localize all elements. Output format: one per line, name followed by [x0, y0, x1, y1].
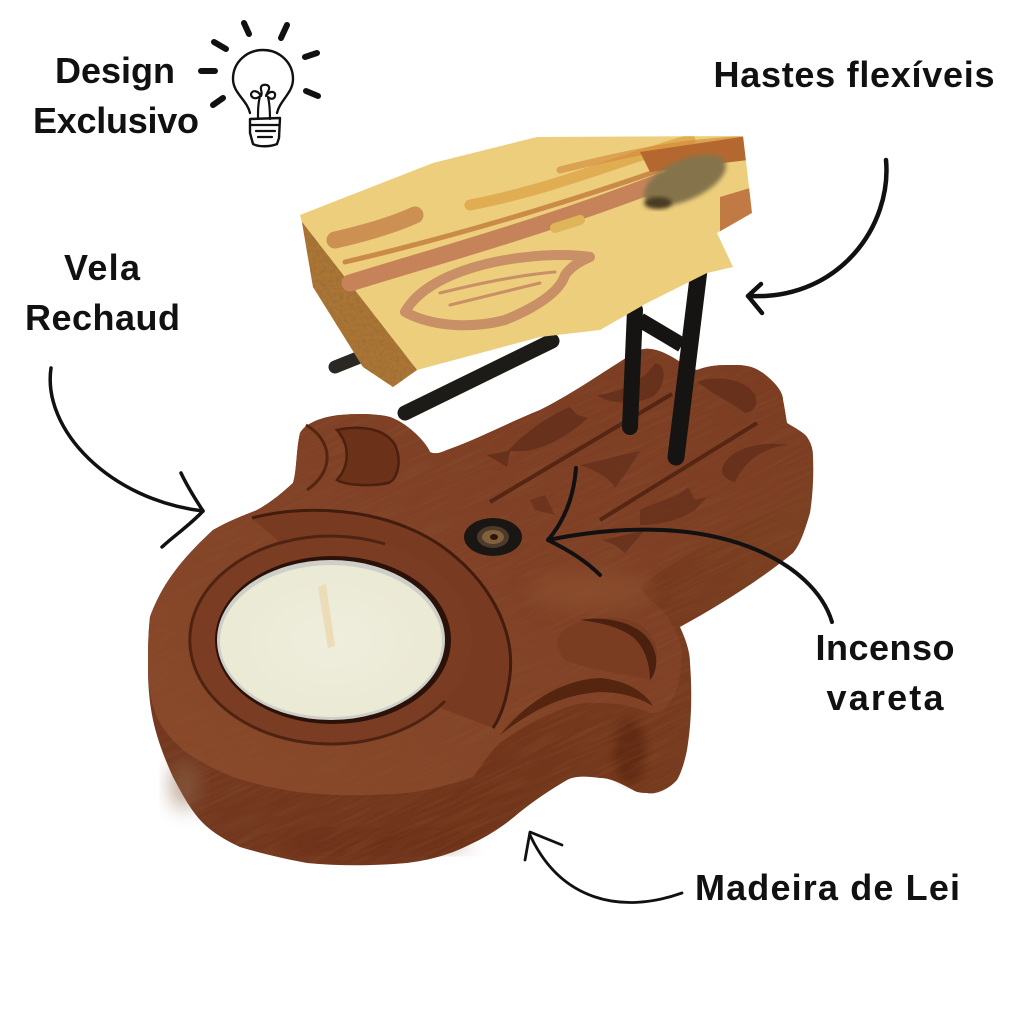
- outer crescent recess: [252, 510, 511, 728]
- tealight candle: [215, 556, 451, 724]
- carved finger grooves: [490, 394, 757, 520]
- label: incenso vareta: vareta: [826, 677, 944, 718]
- dusty patch: [637, 144, 733, 216]
- incense eyelet: [464, 518, 522, 556]
- arrow: incenso vareta: [548, 468, 832, 622]
- label: hastes flexiveis: Hastes flexíveis: [714, 54, 994, 95]
- lower thumb moon carving: [500, 618, 657, 735]
- title: design exclusivo: Design: [55, 50, 175, 91]
- wood grain: [148, 349, 813, 865]
- wooden hamsa holder: [148, 349, 813, 865]
- upper thumb moon carving: [306, 425, 399, 490]
- label: incenso vareta: Incenso: [816, 627, 954, 668]
- label: madeira de lei: Madeira de Lei: [695, 867, 960, 908]
- wood streaks: [335, 136, 752, 325]
- label: vela rechaud: Vela: [64, 247, 141, 288]
- carved fish and moons: [487, 363, 788, 553]
- icon: lightbulb: [201, 23, 318, 146]
- candle ring recess: [190, 536, 472, 744]
- wick: [318, 584, 335, 648]
- oval ring: [405, 255, 590, 325]
- title: design exclusivo: [33, 50, 199, 141]
- metal rods: [335, 270, 699, 457]
- holder top surface: [148, 349, 812, 795]
- wood tone variation: [171, 570, 650, 850]
- label: incenso vareta: [816, 627, 954, 718]
- block end grain face: [302, 222, 417, 387]
- label: vela rechaud: Rechaud: [25, 297, 180, 338]
- palo santo wood block: [300, 136, 752, 387]
- label: vela rechaud: [25, 247, 180, 338]
- arrow: madeira de lei: [525, 832, 682, 902]
- title: design exclusivo: Exclusivo: [33, 100, 199, 141]
- arrow: hastes flexiveis: [748, 160, 886, 313]
- holder side wall: [148, 349, 813, 865]
- arrow: vela rechaud: [50, 368, 203, 547]
